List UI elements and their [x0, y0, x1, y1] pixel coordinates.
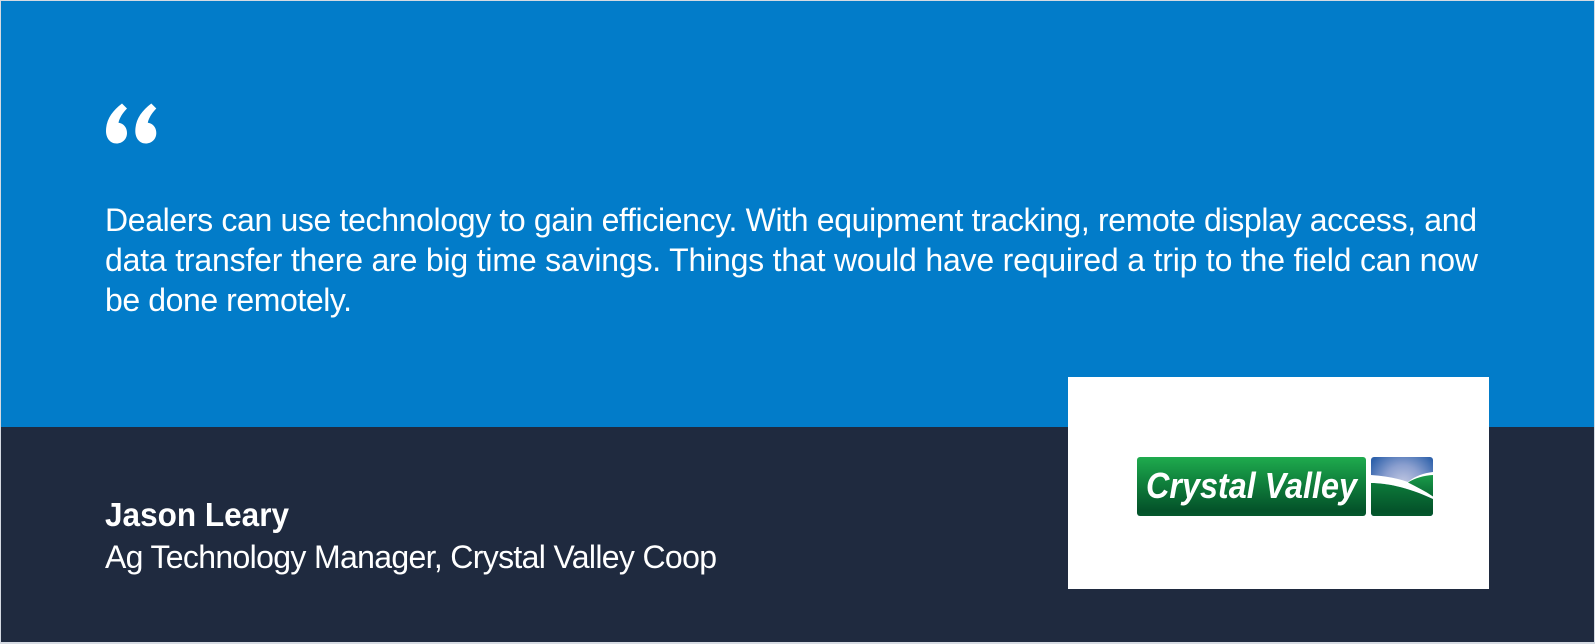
logo: Crystal Valley wordmark: Crystal Valley: [1146, 465, 1359, 506]
icon: opening quotation mark: [106, 104, 156, 144]
text block: quote: Dealers can use technology to gain efficiency. With equipment tracking, remote display access, and: [105, 202, 1477, 238]
logo: Crystal Valley wordmark: [1137, 457, 1366, 516]
panel: blue quote background: [1, 1, 1594, 427]
text block: job title: Ag Technology Manager, Crystal Valley Coop: [105, 539, 717, 575]
text block: quote: [105, 202, 1479, 318]
panel: white logo card: [1068, 377, 1489, 589]
text block: quote: data transfer there are big time savings. Things that would have required a trip to the field can now: [105, 242, 1479, 278]
panel: dark attribution band: [1, 427, 1594, 642]
text block: quote: be done remotely.: [105, 282, 352, 318]
heading: person name: Jason Leary: [105, 496, 290, 533]
logo: landscape mark: [1371, 457, 1433, 516]
